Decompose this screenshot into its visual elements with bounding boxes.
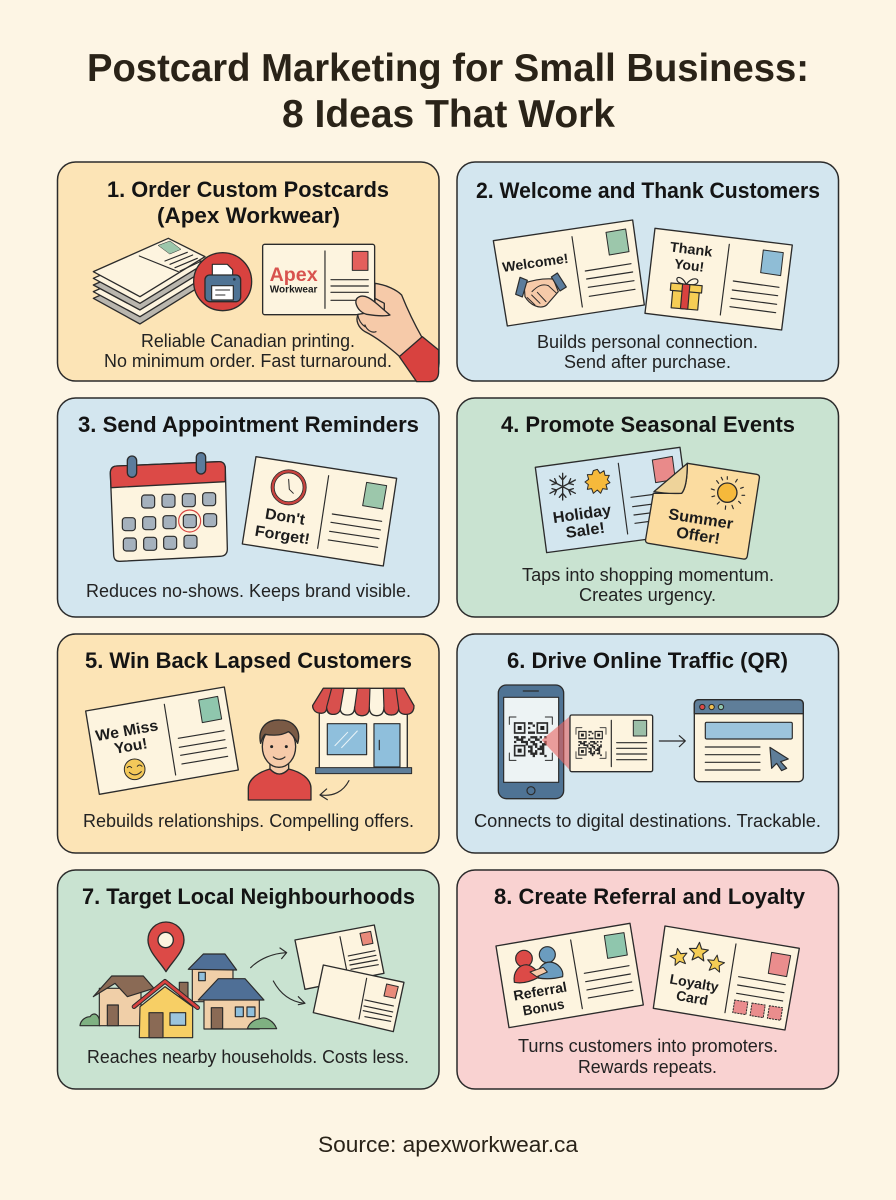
loyalty stamps: [733, 1000, 783, 1020]
body text: panel 8: Rewards repeats.: [578, 1057, 717, 1077]
body text: panel 1: No minimum order. Fast turnaround.: [104, 351, 392, 371]
body text: panel 1: [104, 331, 392, 371]
illustration: neighbourhood and postcards: [80, 922, 404, 1038]
heading: panel 2: 2. Welcome and Thank Customers: [476, 178, 820, 203]
panel: 4 promote seasonal events: [457, 398, 838, 617]
icon: two people shaking hands: [514, 947, 563, 983]
icon: clock: [273, 471, 305, 503]
body text: panel 3: Reduces no-shows. Keeps brand visible.: [86, 581, 411, 601]
icon: houses: [80, 954, 277, 1038]
postcard: Thank You: [645, 228, 792, 330]
icon: gift: [669, 277, 703, 310]
QR code: [514, 723, 547, 756]
postcards: mailed pair: [295, 925, 404, 1032]
icon: smiley: [124, 759, 145, 780]
body text: panel 6: Connects to digital destinations. Trackable.: [474, 811, 821, 831]
heading: panel 7: 7. Target Local Neighbourhoods: [82, 884, 415, 909]
icon: printer badge: [194, 253, 252, 311]
panel: 6 drive online traffic: [457, 634, 838, 853]
postcard: Thank You: Thank: [669, 238, 714, 260]
icon: hand holding card: [356, 283, 439, 382]
illustration: QR scan to website: [498, 685, 803, 799]
illustration: holiday and summer postcards: [535, 447, 759, 559]
postcard: Don't Forget: Forget!: [254, 523, 311, 548]
title: Postcard Marketing for Small Business:: [87, 47, 809, 90]
heading: panel 1: [107, 177, 389, 228]
postcard: Referral Bonus: [496, 923, 643, 1028]
icon: calendar: [110, 453, 227, 561]
heading: panel 1: 1. Order Custom Postcards: [107, 177, 389, 202]
postcard: Don't Forget: Don't: [264, 506, 306, 529]
icon: three stars: [669, 942, 726, 973]
postcard: Referral Bonus: Bonus: [521, 996, 566, 1019]
postcard: Welcome: [493, 220, 644, 326]
postcard: Holiday Sale: Holiday: [552, 502, 613, 527]
illustration: postcard, customer and storefront: [86, 687, 414, 800]
postcard: We Miss You: We Miss: [94, 717, 160, 745]
arrow: postcard to website: [659, 736, 685, 747]
heading: panel 8: 8. Create Referral and Loyalty: [494, 884, 806, 909]
icon: storefront: [313, 688, 414, 774]
icon: customer: [248, 720, 311, 800]
body text: panel 1: Reliable Canadian printing.: [141, 331, 355, 351]
postcard: Holiday Sale: [535, 447, 692, 553]
body text: panel 2: Send after purchase.: [564, 352, 731, 372]
postcard: Holiday Sale: Sale!: [565, 520, 606, 542]
heading: panel 1: (Apex Workwear): [157, 203, 340, 228]
postcard: Loyalty Card: Loyalty: [668, 971, 720, 995]
illustration: calendar and reminder postcard: [110, 453, 397, 566]
heading: panel 4: 4. Promote Seasonal Events: [501, 412, 795, 437]
postcard: We Miss You: You!: [113, 735, 149, 758]
postcard: Summer Offer: Summer: [667, 506, 734, 533]
icon: postcard stack: [93, 238, 205, 324]
postcard: Apex Workwear: Apex: [270, 264, 318, 286]
postcard: Referral Bonus: Referral: [512, 978, 568, 1004]
postcard with QR code: [570, 715, 653, 772]
postcard: Thank You: You!: [673, 256, 705, 275]
panel: 3 send appointment reminders: [58, 398, 439, 617]
panel: 1 order custom postcards: [58, 162, 439, 382]
panel: 8 create referral and loyalty: [457, 870, 838, 1089]
heading: panel 6: 6. Drive Online Traffic (QR): [507, 648, 788, 673]
body text: panel 5: Rebuilds relationships. Compelling offers.: [83, 811, 414, 831]
icon: phone with QR code: [498, 685, 564, 799]
icon: winter sun: [585, 469, 610, 493]
icon: snowflake: [550, 473, 575, 500]
illustration: referral and loyalty postcards: [496, 923, 799, 1030]
body text: panel 8: Turns customers into promoters.: [518, 1036, 778, 1056]
heading: panel 3: 3. Send Appointment Reminders: [78, 412, 419, 437]
title: 8 Ideas That Work: [282, 93, 615, 136]
postcard: Welcome: Welcome!: [501, 251, 569, 275]
body text: panel 2: [537, 332, 758, 372]
body text: panel 4: [522, 565, 774, 605]
body text: panel 2: Builds personal connection.: [537, 332, 758, 352]
postcard: Apex Workwear: Workwear: [270, 284, 318, 295]
illustration: postcard stack, printer and hand: [93, 238, 439, 382]
panel: 7 target local neighbourhoods: [58, 870, 439, 1089]
postcard: We Miss You: [86, 687, 238, 794]
postcard: Summer Offer: [646, 463, 759, 559]
postcard: Loyalty Card: Card: [675, 987, 709, 1008]
body text: panel 4: Taps into shopping momentum.: [522, 565, 774, 585]
panel: 5 win back lapsed customers: [58, 634, 439, 853]
icon: browser window: [694, 700, 803, 782]
body text: panel 7: Reaches nearby households. Costs less.: [87, 1047, 409, 1067]
panel: 2 welcome and thank customers: [457, 162, 838, 381]
illustration: welcome and thank you postcards: [493, 220, 792, 330]
postcard: Loyalty Card: [653, 926, 799, 1030]
body text: panel 4: Creates urgency.: [579, 585, 716, 605]
source line: Source: apexworkwear.ca: [318, 1132, 579, 1157]
postcard: Apex Workwear: [263, 244, 375, 315]
scan beam: [542, 716, 571, 771]
arrow: store to customer: [320, 781, 349, 800]
heading: panel 5: 5. Win Back Lapsed Customers: [85, 648, 412, 673]
icon: map pin: [148, 922, 184, 972]
arrows: houses to postcards: [251, 948, 305, 1005]
postcard: Don't Forget: [242, 457, 397, 566]
postcard: Summer Offer: Offer!: [675, 524, 721, 548]
title: [87, 47, 809, 136]
icon: handshake: [516, 273, 566, 307]
body text: panel 8: [518, 1036, 778, 1077]
